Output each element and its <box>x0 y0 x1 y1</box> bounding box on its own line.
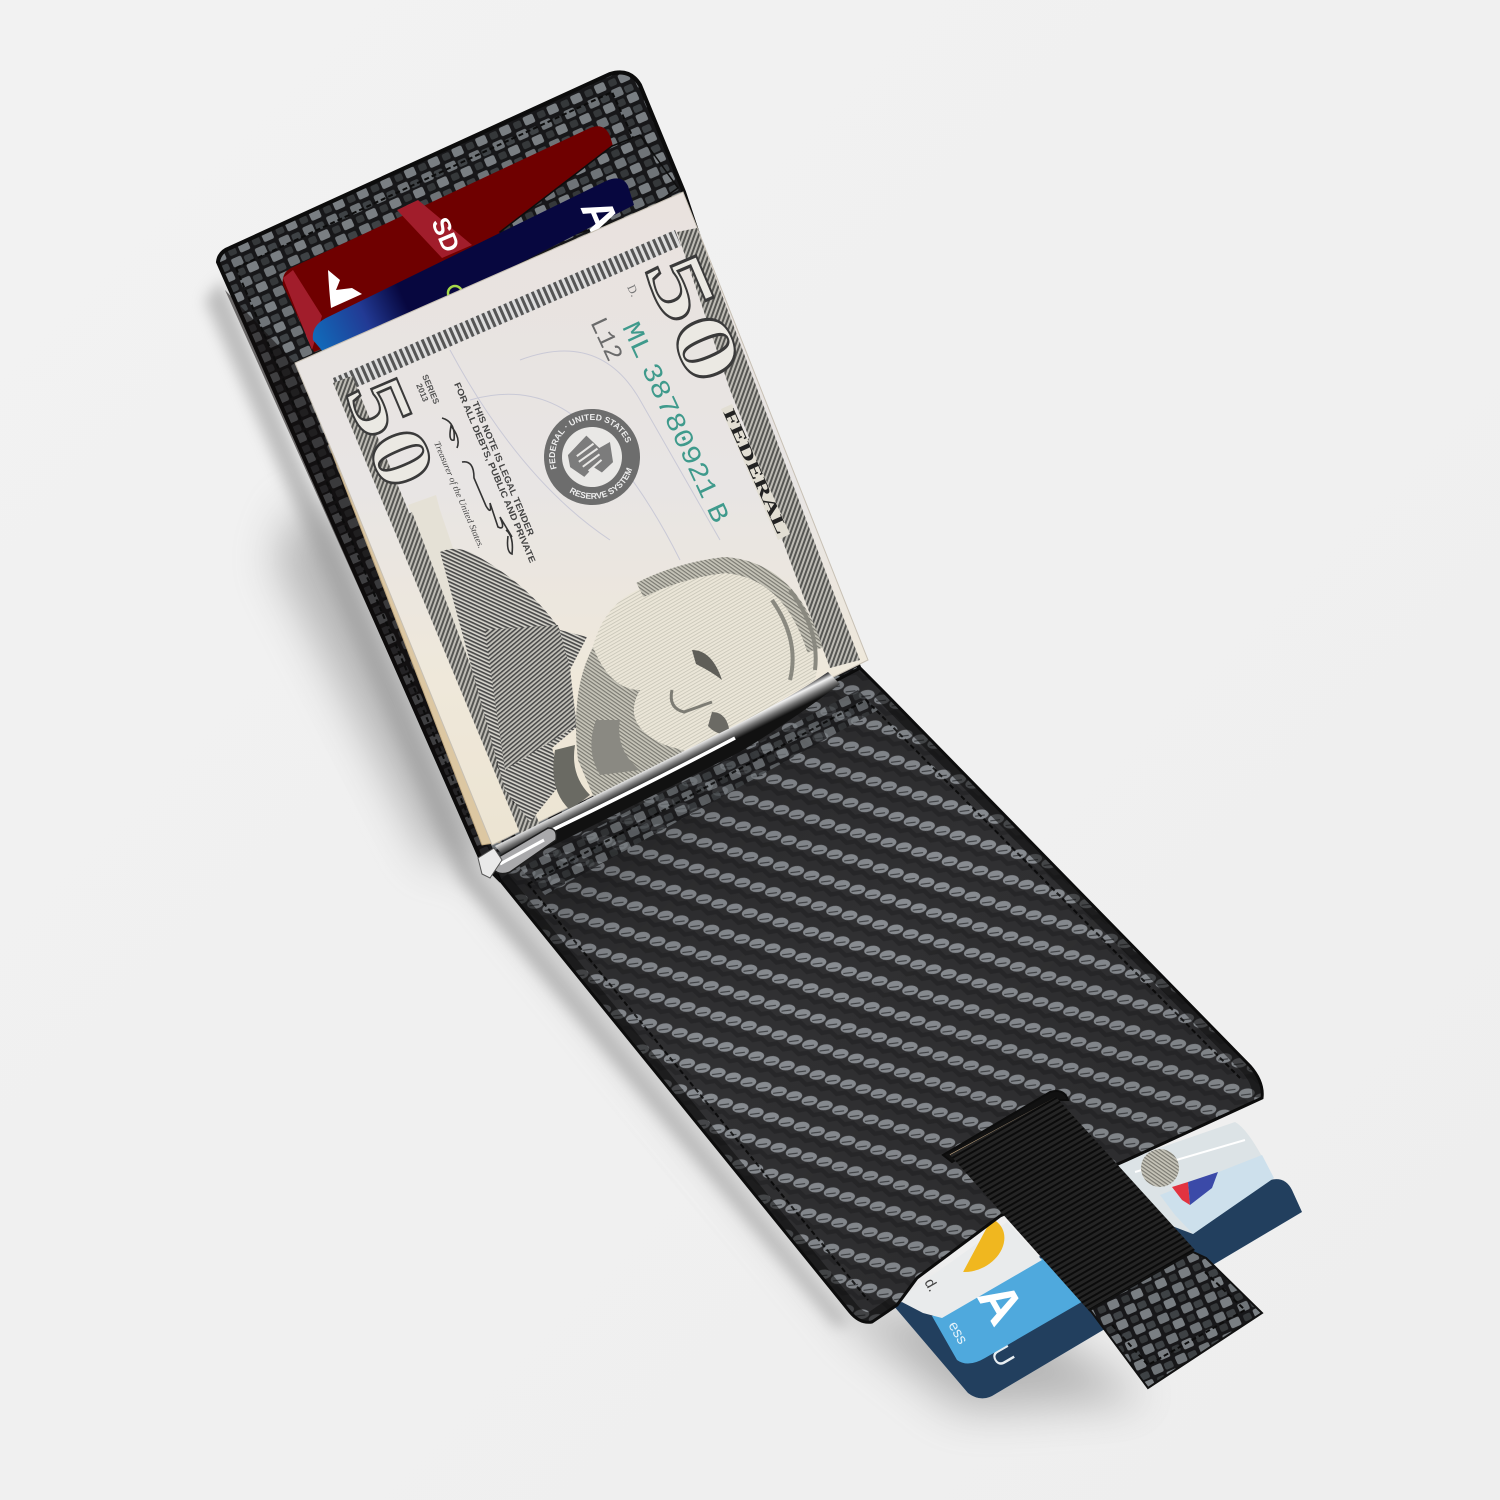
card logo: lime ring <box>448 286 462 300</box>
card stripe <box>397 200 472 258</box>
border word: GRANT: GRANT <box>492 757 523 809</box>
treasurer line: Treasurer of the United States. <box>432 440 486 550</box>
bill: fifty dollar note <box>294 191 868 846</box>
pocket lip <box>500 135 678 250</box>
portrait: eye lower <box>708 712 729 734</box>
seal text bottom: RESERVE SYSTEM <box>570 468 632 500</box>
portrait: face base <box>590 571 817 790</box>
card hologram <box>1141 1149 1179 1187</box>
border word: FEDERAL: FEDERAL <box>719 406 792 537</box>
contact shadow <box>205 280 850 1325</box>
stitching: tab <box>1112 1272 1245 1365</box>
legal note line one: THIS NOTE IS LEGAL TENDER <box>470 400 536 538</box>
card logo: blue <box>1188 1172 1218 1205</box>
border: left band <box>333 376 540 838</box>
border: left inner strip <box>408 495 472 670</box>
bill artwork <box>333 228 860 834</box>
product illustration: wallet with bill and cards <box>202 70 1302 1436</box>
portrait: coat <box>440 549 587 822</box>
portrait: nose <box>671 690 712 712</box>
serial number: ML 38780921 B <box>614 318 733 528</box>
series: SERIES <box>420 373 442 406</box>
seal shield <box>576 443 602 472</box>
strap: black ribbon <box>950 1097 1195 1312</box>
bill paper <box>295 192 868 845</box>
watermark <box>450 350 720 560</box>
legal note line two: FOR ALL DEBTS, PUBLIC AND PRIVATE <box>452 381 538 564</box>
back panel dark strip <box>225 290 490 862</box>
cards: lower navy card <box>893 1179 1302 1398</box>
panel dark edge <box>500 690 1262 1322</box>
card text: A: A <box>571 192 628 240</box>
card logo: red <box>1172 1182 1190 1205</box>
strap: carbon tab <box>1090 1252 1262 1388</box>
numeral: left 50: 50 <box>327 364 454 501</box>
card text: ess: ess <box>945 1318 971 1347</box>
signature <box>442 418 512 554</box>
card logo: white arrow <box>328 270 362 308</box>
clip end tube <box>490 828 556 874</box>
clip end pin <box>478 848 502 878</box>
panel: front carbon panel <box>492 668 1262 1322</box>
card text: U: U <box>985 1340 1021 1372</box>
portrait: forehead hair <box>640 565 815 650</box>
card text: d.: d. <box>921 1276 942 1295</box>
portrait: beard shading <box>591 720 640 775</box>
card logo: yellow circle <box>930 1205 1014 1283</box>
portrait: hair and beard <box>576 647 684 796</box>
card white line <box>1135 1140 1245 1172</box>
border: right lower band <box>745 430 860 668</box>
border: top rope <box>333 230 681 395</box>
stitching: back panel <box>236 92 664 820</box>
card text: A: A <box>966 1273 1035 1335</box>
panel: back leather panel <box>218 72 860 880</box>
drop shadow <box>275 500 1150 1410</box>
portrait: eye upper <box>692 650 722 680</box>
card: red card <box>283 126 613 352</box>
card lower band <box>1160 1155 1274 1234</box>
card: pale card right side <box>1110 1122 1274 1234</box>
series year: 2013 <box>414 382 431 403</box>
money clip: chrome bar <box>478 672 840 878</box>
border: right label strip <box>721 404 790 540</box>
portrait: lapel <box>485 625 576 770</box>
border: right band <box>677 228 836 598</box>
seal text top: FEDERAL · UNITED STATES <box>549 414 631 470</box>
panel shading <box>492 668 1262 1322</box>
glossy strip under clip <box>520 690 878 895</box>
card: light blue card <box>932 1258 1092 1364</box>
seal: federal reserve <box>544 409 640 505</box>
card: white card <box>898 1205 1042 1318</box>
card: blue card <box>313 178 634 360</box>
clip highlight <box>548 738 735 832</box>
portrait: side hair <box>772 590 816 680</box>
card left stripe <box>283 270 322 350</box>
stitching: front panel <box>528 700 1240 1300</box>
clip end tube highlight <box>500 840 544 864</box>
plate code: L12 <box>583 313 628 366</box>
card text: SD: SD <box>425 213 465 256</box>
slot: strap opening <box>943 1091 1068 1162</box>
seal eagle <box>568 436 613 477</box>
numeral: right 50: 50 <box>626 240 761 396</box>
district letter: D. <box>624 282 642 299</box>
bill stack pages <box>329 445 500 845</box>
portrait: collar <box>553 745 590 810</box>
border: left strip band <box>410 512 478 692</box>
slot: tan edge <box>950 1098 1056 1155</box>
